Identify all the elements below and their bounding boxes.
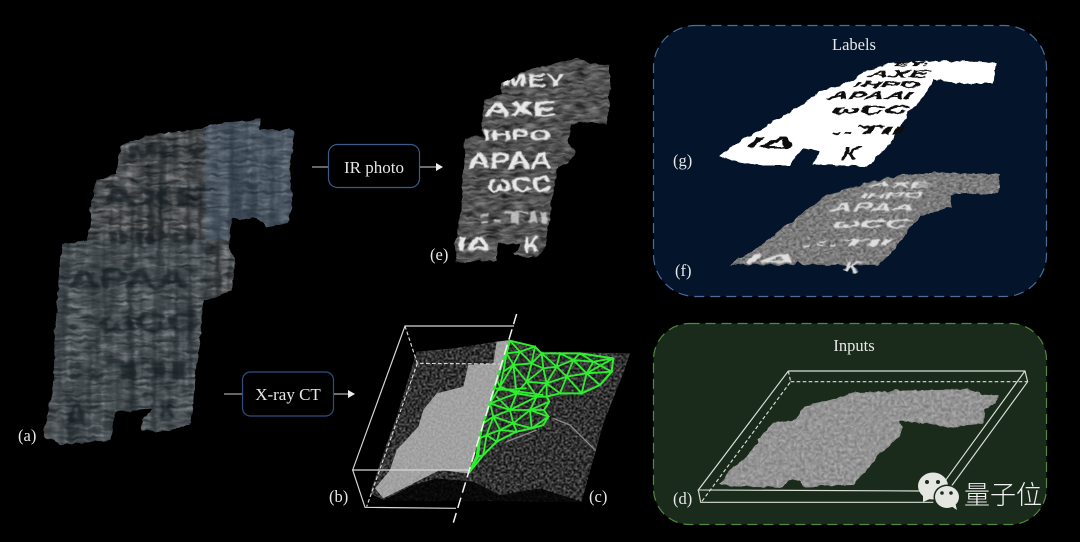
binary label map (g): ΑΧΕ: [864, 69, 934, 79]
binary label map (g): Κ: [838, 145, 863, 163]
binary label map (g): ΙΗΡΟ: [850, 81, 924, 89]
panel: Inputs: [654, 324, 1046, 542]
flow: X-ray CT: [224, 372, 355, 416]
faint ink letters: Κ: [160, 401, 175, 423]
faint ink letters: [64, 143, 209, 428]
panel: IR photo result (e): [454, 58, 612, 264]
IR letters: ΙΗΡΟ: [483, 127, 552, 144]
faint ink letters: ΜΕΥ: [128, 143, 209, 162]
faint ink letters: Δ: [66, 397, 86, 428]
flow: X-ray CT: X-ray CT: [255, 385, 321, 404]
IR letters: ΜΕΥ: [503, 71, 566, 90]
heading: Inputs: Inputs: [833, 336, 875, 355]
icon: chat bubbles: [918, 472, 960, 510]
warped IR image (f): ΑΧΕ: [866, 181, 933, 189]
label (g): (g): [673, 151, 692, 170]
CT surface: [370, 340, 630, 502]
label (d): (d): [673, 489, 692, 508]
binary label map (g): ΕΥ:: [890, 61, 933, 68]
warped IR image (f): [730, 171, 1000, 274]
label (a): (a): [18, 426, 36, 445]
faint ink letters: ΑΧΕ: [100, 182, 208, 212]
faint ink letters: ΑΡΑΑ: [68, 264, 188, 294]
label (f): (f): [675, 261, 691, 280]
cut line: [453, 314, 517, 523]
panel: Labels: [654, 26, 1046, 296]
faint ink letters: :.ΤΙΙ: [64, 357, 188, 384]
label (e): (e): [430, 245, 448, 264]
IR letters: ΙΔ: [457, 234, 491, 255]
warped IR image (f): ΙΗΡΟ: [856, 191, 928, 200]
binary label map (g): [719, 61, 997, 167]
flow: IR photo: [312, 144, 443, 188]
warped IR image (f): ΑΡΑΑ: [826, 202, 920, 213]
binary label map (g): ΙΔ: [741, 134, 804, 152]
watermark: [918, 472, 1042, 510]
wordmark: 量子位: [964, 480, 1042, 510]
faint ink letters: ΙΗΡΟ: [108, 229, 198, 248]
label (b): (b): [329, 487, 348, 506]
green mesh: [468, 341, 613, 473]
IR letters: ΑΡΑΑ: [468, 148, 552, 173]
CT slice input (d): [718, 388, 999, 488]
wireframe box: [698, 371, 1028, 502]
warped IR image (f): Κ: [840, 259, 864, 276]
faint ink letters: ωCC: [98, 307, 198, 337]
binary label map (g): ..ΤΙΙ: [828, 124, 909, 137]
IR letters: ΑΧΕ: [485, 99, 556, 121]
warped IR image (f): .:.ΤΙΙ: [798, 238, 896, 249]
flow: IR photo: IR photo: [344, 158, 404, 177]
IR letters: [457, 71, 566, 257]
panel: CT volume with mesh (b, c): [353, 314, 635, 540]
heading: Labels: Labels: [832, 35, 876, 54]
IR letters: Κ: [524, 234, 539, 257]
warped IR image (f): ωCC: [828, 216, 914, 231]
warped IR image (f): ΙΔ: [741, 252, 802, 266]
label (c): (c): [589, 487, 607, 506]
binary label map (g): ωCC: [828, 102, 914, 117]
IR letters: :.ΤΙΙ: [478, 208, 550, 227]
panel: visible-light photo (a): [40, 115, 300, 450]
binary label map (g): ΑΡΑΑΙ: [824, 90, 918, 102]
wireframe box: [353, 326, 514, 508]
IR letters: ωCC: [487, 172, 552, 197]
